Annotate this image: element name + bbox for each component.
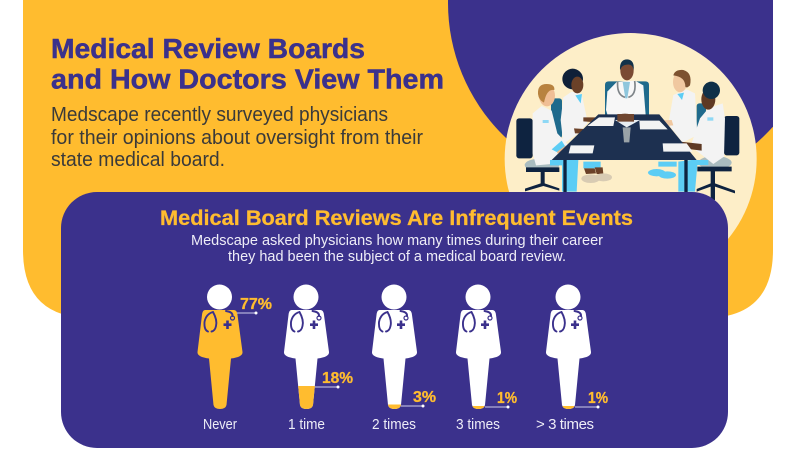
doctor: front right with chair <box>678 82 739 200</box>
doctor: back right <box>648 70 706 179</box>
illustration: doctors meeting around a table <box>505 33 757 285</box>
cream circle <box>505 33 757 285</box>
panel description: they had been the subject of a medical board review. <box>228 248 566 265</box>
figure: 2 times 3%: 2 times <box>372 416 416 433</box>
figure: 2 times 3%: 3% <box>413 389 436 406</box>
figure: more than 3 times 1% <box>536 284 608 433</box>
purple circle behind illustration <box>448 0 773 144</box>
panel description: Medscape asked physicians how many times during their career <box>191 232 603 249</box>
figure: 1 time 18% <box>284 284 353 433</box>
panel heading: Medical Board Reviews Are Infrequent Events <box>160 207 633 230</box>
intro text block <box>51 104 423 171</box>
conference table <box>552 114 697 193</box>
figure: 3 times 1%: 1% <box>497 390 517 407</box>
title <box>51 33 444 94</box>
figure: 3 times 1%: 3 times <box>456 416 500 433</box>
figure: Never 77% <box>197 284 272 433</box>
panel: yellow header background <box>23 0 773 318</box>
doctor: back left <box>551 69 612 183</box>
panel: medical board reviews <box>61 192 728 448</box>
title: Medical Review Boards <box>51 33 365 64</box>
intro text block: Medscape recently surveyed physicians <box>51 104 388 126</box>
figure: more than 3 times 1%: > 3 times <box>536 416 594 433</box>
figure: 1 time 18%: 1 time <box>288 416 325 433</box>
doctor: centre <box>605 59 649 122</box>
intro text block: for their opinions about oversight from their <box>51 127 423 149</box>
intro text block: state medical board. <box>51 149 225 171</box>
figure: 3 times 1% <box>456 284 517 433</box>
figure: 2 times 3% <box>372 284 436 433</box>
figure: Never 77%: Never <box>203 416 237 433</box>
figure: Never 77%: 77% <box>240 296 272 313</box>
figure: more than 3 times 1%: 1% <box>588 390 608 407</box>
doctor: front left with chair <box>516 84 578 192</box>
panel description <box>191 232 603 265</box>
panel background <box>61 192 728 448</box>
title: and How Doctors View Them <box>51 64 444 94</box>
figure: 1 time 18%: 18% <box>322 370 353 387</box>
